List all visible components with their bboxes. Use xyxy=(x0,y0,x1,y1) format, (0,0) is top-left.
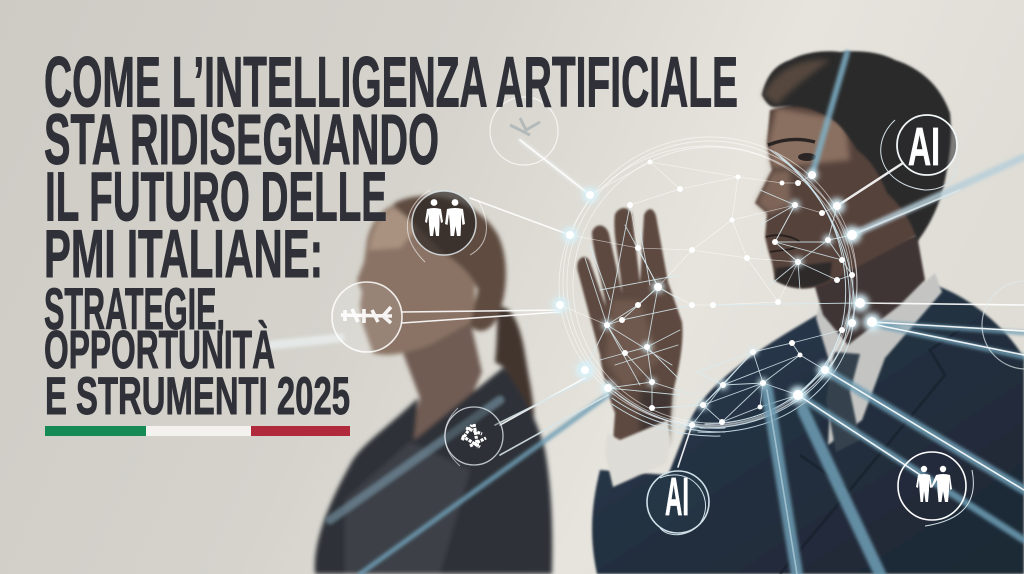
network sphere xyxy=(272,53,1024,574)
italian flag bar xyxy=(45,426,350,436)
man palm light xyxy=(605,300,660,390)
sphere mesh xyxy=(560,162,837,325)
man wrist shadow xyxy=(640,390,672,445)
network nodes glow xyxy=(552,169,881,430)
woman neck xyxy=(400,320,482,445)
man chin shadow xyxy=(775,262,832,288)
man face xyxy=(755,90,930,288)
woman figure xyxy=(315,196,552,574)
faded glyph xyxy=(510,118,540,135)
woman hair xyxy=(393,196,506,331)
man hand xyxy=(577,208,683,443)
man nose light xyxy=(757,170,790,214)
man cuff xyxy=(605,420,671,487)
woman forehead light xyxy=(369,208,420,250)
man forehead light xyxy=(768,108,850,168)
subtitle line 2: OPPORTUNITÀ xyxy=(44,320,275,380)
icon: circle with gears lower xyxy=(445,407,503,466)
title line 4: PMI ITALIANE: xyxy=(44,216,323,292)
subtitle line 1: STRATEGIE, xyxy=(44,277,225,342)
title line 2: STA RIDISEGNANDO xyxy=(44,101,439,180)
man suit xyxy=(592,286,1024,574)
icon: faded top circle xyxy=(490,97,558,165)
network nodes xyxy=(556,160,877,428)
man neck xyxy=(815,235,925,345)
hand and face mesh xyxy=(585,190,860,425)
light beams xyxy=(272,53,1024,574)
title xyxy=(44,44,738,426)
woman ponytail xyxy=(495,307,534,420)
man eye xyxy=(798,153,816,161)
man lapel xyxy=(780,330,960,574)
man eyebrow xyxy=(768,139,815,145)
icon: AI badge bottom xyxy=(647,467,709,535)
woman face xyxy=(357,205,475,355)
beam cores xyxy=(402,140,1024,574)
man figure xyxy=(577,51,1024,574)
man lips xyxy=(766,235,800,252)
man tie xyxy=(826,352,860,452)
sphere rings xyxy=(559,137,857,436)
icon: people circle bottom right xyxy=(898,452,973,526)
icon: AI badge bottom: AI xyxy=(665,467,689,527)
icon: partial circle right edge xyxy=(982,281,1024,369)
people glyphs xyxy=(916,466,952,502)
people glyphs xyxy=(425,199,465,236)
woman jacket panel xyxy=(345,442,470,574)
AI label: AI xyxy=(908,117,940,177)
glyph cluster xyxy=(341,307,392,323)
icon: circle with glyph near mouth xyxy=(332,282,402,352)
man fringe highlight xyxy=(763,60,830,105)
icon: people circle top xyxy=(407,190,486,262)
woman jacket xyxy=(315,367,552,574)
man shirt collar xyxy=(816,273,942,445)
subtitle line 3: E STRUMENTI 2025 xyxy=(45,367,350,426)
glyph cluster xyxy=(462,424,486,448)
icon: AI badge top right xyxy=(881,115,957,190)
title line 3: IL FUTURO DELLE xyxy=(45,158,387,236)
man hair xyxy=(762,51,951,242)
